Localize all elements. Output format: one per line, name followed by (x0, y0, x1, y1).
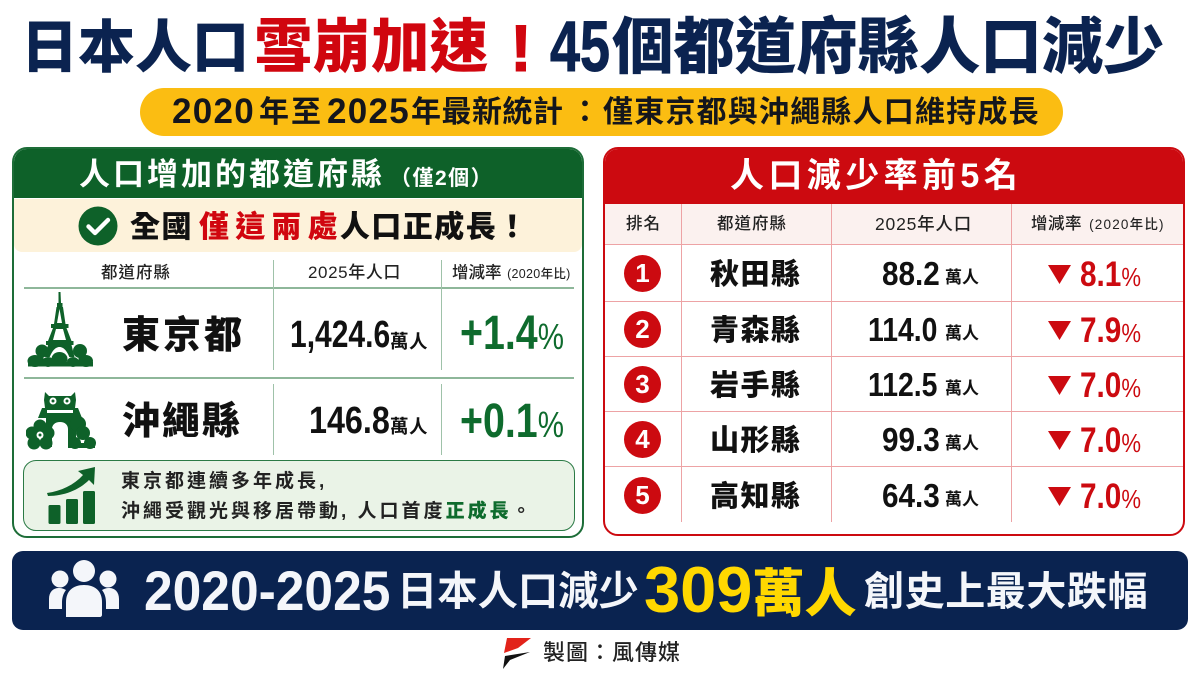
rank badge (624, 311, 661, 348)
rank badge (624, 477, 661, 514)
prefecture name: 高知縣 (710, 481, 802, 513)
rank badge: 1 (635, 258, 650, 288)
callout text: 全國僅這兩處人口正成長！ (130, 211, 529, 244)
down arrow (1048, 487, 1071, 506)
population value: 114.0 (868, 311, 937, 348)
rank badge: 4 (635, 424, 650, 454)
population value: 112.5 (868, 366, 937, 403)
icon: Okinawa shisa (26, 392, 96, 450)
column: prefecture: 都道府縣 (717, 215, 787, 233)
population value: 88.2 (882, 255, 940, 292)
icon: Tokyo tower (28, 292, 93, 367)
highlighted figure: 309萬人 (644, 553, 856, 626)
population unit: 萬人 (945, 434, 979, 453)
down arrow (1048, 265, 1071, 284)
title (21, 8, 1165, 87)
callout: only two places (14, 199, 582, 252)
icon: check circle (78, 206, 118, 246)
banner text: 日本人口減少 (397, 569, 639, 614)
down arrow (1048, 376, 1071, 395)
population value: 1,424.6 (290, 314, 390, 356)
title part 3: 個都道府縣人口減少 (612, 13, 1165, 82)
population unit: 萬人 (390, 416, 428, 437)
column: 2025 population: 2025年人口 (875, 214, 972, 234)
subtitle text (172, 92, 1040, 131)
change rate: 7.0% (1080, 421, 1141, 460)
population value: 146.8 (309, 400, 390, 442)
change rate: 8.1% (1080, 255, 1141, 294)
subtitle latest stats: 年最新統計 (411, 96, 564, 129)
panel heading text: 人口增加的都道府縣（僅2個） (79, 157, 493, 192)
change rate: +1.4% (460, 307, 564, 360)
population value: 99.3 (882, 421, 940, 458)
subtitle connector: 年至 (259, 96, 323, 129)
prefecture name: 東京都 (122, 315, 245, 357)
panel header (603, 147, 1185, 204)
subtitle message: 僅東京都與沖繩縣人口維持成長 (603, 96, 1040, 129)
column: prefecture: 都道府縣 (101, 264, 171, 282)
credit text: 製圖：風傳媒 (543, 640, 681, 665)
column: change rate: 增減率 (2020年比) (1031, 215, 1165, 233)
subtitle pill (140, 88, 1063, 136)
population value: 64.3 (882, 477, 940, 514)
rank badge (624, 421, 661, 458)
column: rank: 排名 (626, 215, 661, 233)
down arrow (1048, 321, 1071, 340)
panel header (12, 147, 584, 198)
row 3: Iwate (624, 366, 1141, 405)
bottom banner (12, 551, 1188, 630)
row: Okinawa (122, 395, 564, 448)
change rate: 7.9% (1080, 311, 1141, 350)
population unit: 萬人 (945, 379, 979, 398)
prefecture name: 沖繩縣 (122, 401, 242, 443)
prefecture name: 秋田縣 (710, 259, 802, 291)
prefecture name: 岩手縣 (710, 370, 802, 402)
row: Tokyo (122, 307, 564, 360)
column: 2025 population: 2025年人口 (308, 263, 401, 282)
prefecture name: 青森縣 (710, 315, 802, 347)
subtitle year 2020: 2020 (172, 92, 255, 131)
title part 1: 日本人口 (21, 16, 249, 80)
rank badge (624, 366, 661, 403)
title part 2 highlighted: 雪崩加速 (254, 15, 488, 80)
row 1: Akita (624, 255, 1141, 294)
banner years: 2020-2025 (144, 559, 390, 622)
population unit: 萬人 (945, 268, 979, 287)
subtitle year 2025: 2025 (327, 92, 410, 131)
icon: people group (49, 560, 119, 617)
subtitle colon: ： (570, 96, 600, 129)
banner text end: 創史上最大跌幅 (864, 570, 1148, 614)
panel heading text: 人口減少率前5名 (730, 157, 1022, 195)
note text: 東京都連續多年成長, (121, 471, 327, 492)
population unit: 萬人 (945, 490, 979, 509)
row 2: Aomori (624, 311, 1141, 350)
row 5: Kochi (624, 477, 1141, 516)
population unit: 萬人 (945, 324, 979, 343)
rank badge: 3 (635, 369, 650, 399)
title number: 45 (550, 8, 610, 87)
note text (121, 470, 534, 523)
note text: 沖繩受觀光與移居帶動, 人口首度正成長。 (121, 496, 534, 523)
column: change rate: 增減率 (2020年比) (452, 264, 571, 282)
rank badge: 5 (635, 480, 650, 510)
title exclamation: ! (510, 11, 532, 85)
change rate: 7.0% (1080, 477, 1141, 516)
note box (23, 460, 575, 531)
panel: top 5 population decline (603, 147, 1185, 536)
icon: Storm Media logo (502, 636, 532, 669)
change rate: +0.1% (460, 395, 564, 448)
footer credit (500, 634, 684, 670)
row lines (24, 287, 574, 289)
table header row (605, 204, 1183, 244)
icon: rising bar chart (47, 467, 95, 524)
rank badge (624, 255, 661, 292)
panel: prefectures with population increase (12, 147, 584, 538)
population unit: 萬人 (390, 331, 428, 352)
down arrow (1048, 431, 1071, 450)
rank badge: 2 (635, 314, 650, 344)
change rate: 7.0% (1080, 366, 1141, 405)
row 4: Yamagata (624, 421, 1141, 460)
table column headers (101, 263, 571, 282)
grid lines (605, 244, 1183, 245)
prefecture name: 山形縣 (710, 425, 802, 457)
